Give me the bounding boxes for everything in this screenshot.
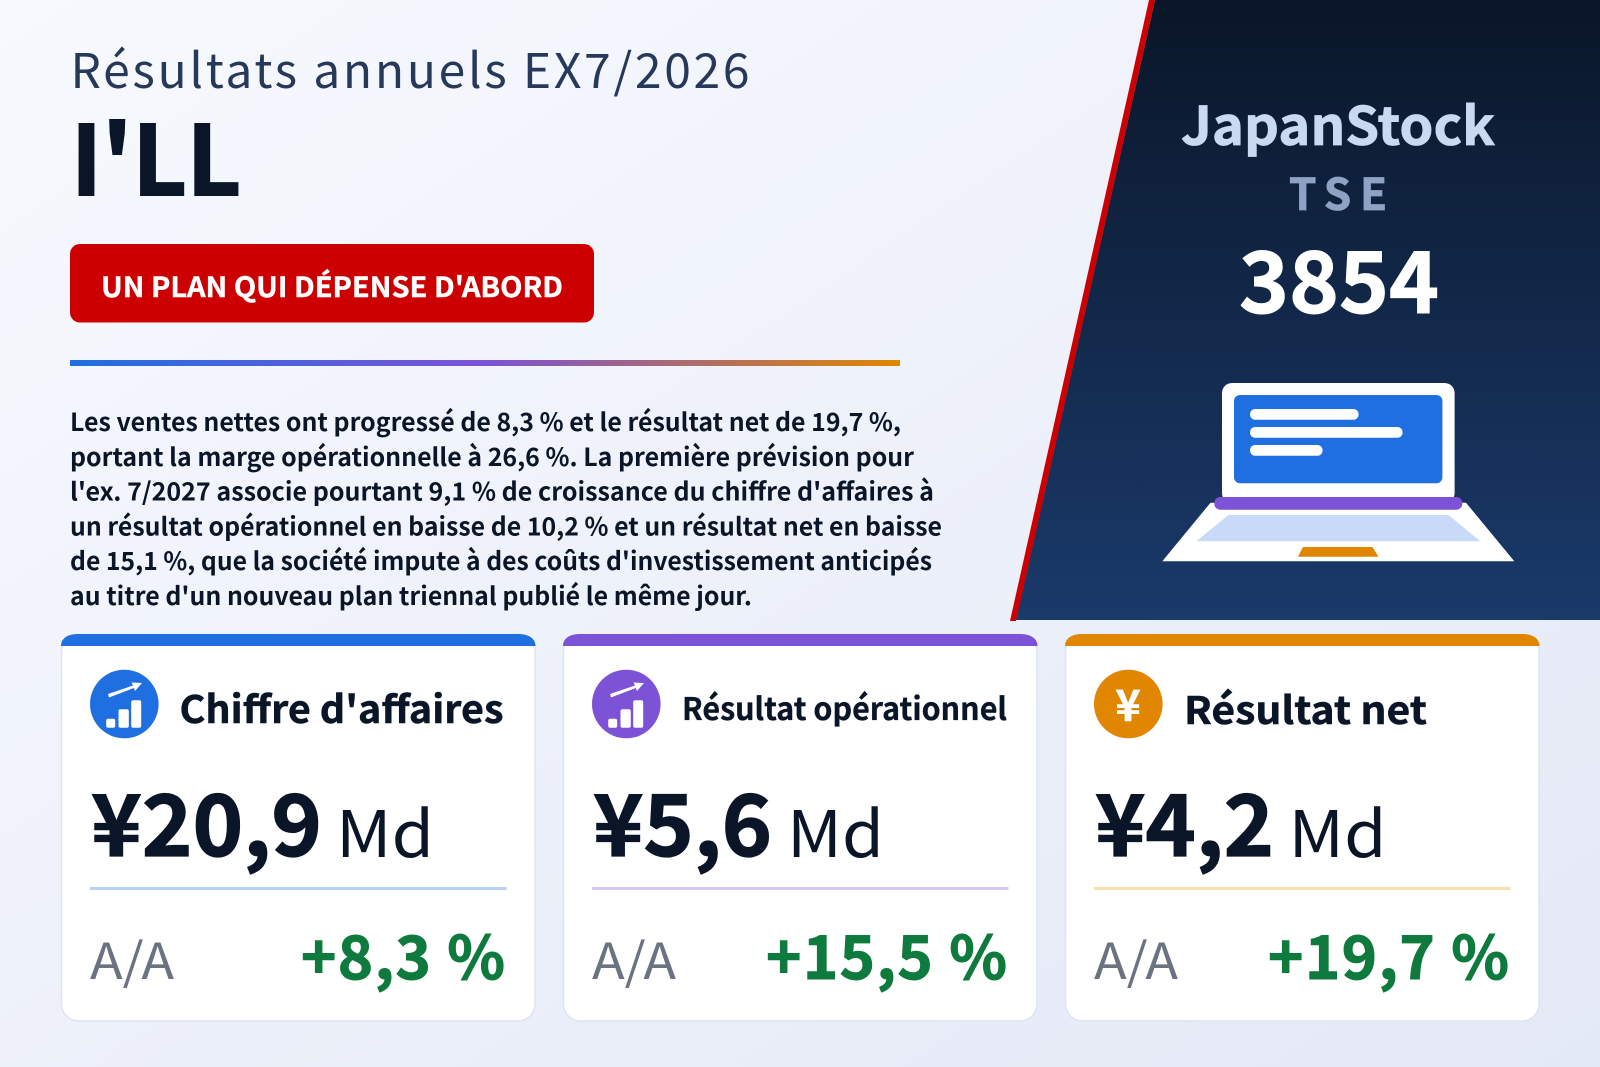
text block: summary: au titre d'un nouveau plan triennal publié le même jour. (70, 577, 752, 613)
badge: headline tag (70, 244, 594, 322)
year-over-year label: A/A (592, 922, 677, 994)
ticker code: 3854 (1239, 215, 1439, 338)
heading: company: I'LL (71, 84, 241, 223)
text block: summary: de 15,1 %, que la société impute à des coûts d'investissement anticipés (70, 542, 932, 578)
value: ¥5,6 (593, 758, 772, 881)
year-over-year label: A/A (90, 922, 175, 994)
icon: rising bars (90, 670, 159, 738)
card title: Résultat opérationnel (682, 684, 1007, 729)
unit: Md (336, 784, 434, 876)
badge: headline tag: UN PLAN QUI DÉPENSE D'ABORD (101, 266, 563, 306)
panel: résultat opérationnel (563, 634, 1038, 1021)
icon: yen coin (1094, 670, 1163, 738)
icon: rising bars (592, 670, 661, 738)
text block: summary: l'ex. 7/2027 associe pourtant 9,1 % de croissance du chiffre d'affaires à (70, 473, 934, 509)
text block: summary (70, 403, 942, 613)
icon: yen coin: ¥ (1115, 672, 1141, 734)
panel: chiffre d'affaires (61, 634, 536, 1021)
panel: résultat net (1065, 634, 1540, 1021)
year-over-year label: A/A (1094, 922, 1179, 994)
text block: summary: un résultat opérationnel en baisse de 10,2 % et un résultat net en baisse (70, 507, 942, 543)
value: ¥20,9 (91, 758, 322, 881)
heading: subtitle: Résultats annuels EX7/2026 (70, 32, 750, 102)
exchange label: TSE (1289, 159, 1387, 223)
value: ¥4,2 (1095, 758, 1274, 881)
card title: Chiffre d'affaires (180, 679, 504, 734)
icon: laptop (1162, 383, 1514, 561)
company name: JapanStock (1181, 85, 1495, 161)
card title: Résultat net (1184, 680, 1427, 735)
unit: Md (787, 784, 884, 876)
year-over-year value: +15,5 % (766, 910, 1007, 997)
unit: Md (1288, 784, 1386, 876)
text block: summary: portant la marge opérationnelle à 26,6 %. La première prévision pour (70, 438, 914, 474)
year-over-year value: +8,3 % (301, 910, 505, 997)
year-over-year value: +19,7 % (1268, 910, 1509, 997)
panel: ticker and laptop (1010, 0, 1600, 621)
text block: summary: Les ventes nettes ont progressé de 8,3 % et le résultat net de 19,7 %, (70, 403, 901, 439)
